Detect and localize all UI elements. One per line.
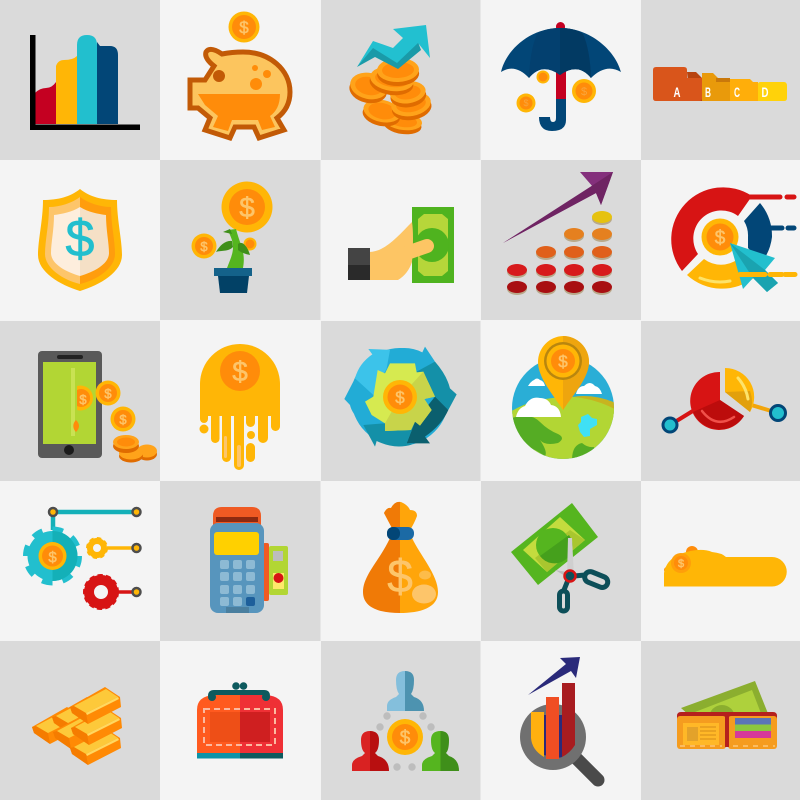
icon: umbrella: $ bbox=[581, 86, 587, 98]
icon: dripping coin: $ bbox=[232, 356, 248, 387]
icon: connected gears bbox=[28, 508, 140, 608]
icon: smartphone with coins: $ bbox=[79, 392, 87, 407]
icon: tabbed folders: D bbox=[762, 84, 768, 100]
icon: money plant bbox=[192, 182, 272, 293]
icon: smartphone with coins: $ bbox=[119, 412, 127, 427]
icon: card payment terminal bbox=[210, 507, 288, 613]
icon: growth arrow and coin columns bbox=[503, 172, 613, 295]
icon: circular arrows around coin: $ bbox=[395, 388, 405, 407]
icon: wallet with cash bbox=[677, 681, 777, 749]
icon: tabbed folders: A bbox=[674, 84, 680, 100]
icon: coin stack with arrow bbox=[347, 25, 433, 137]
icon: scissors cutting banknote bbox=[511, 503, 609, 611]
icon: piggy bank: $ bbox=[239, 18, 249, 37]
icon: dripping coin bbox=[200, 344, 280, 470]
icon: umbrella: $ bbox=[523, 98, 529, 108]
icon: globe with location pin: $ bbox=[558, 352, 568, 371]
icon: bar chart bbox=[30, 35, 140, 130]
icon: target with paper plane: $ bbox=[715, 228, 726, 249]
icon: coin purse bbox=[197, 682, 283, 758]
icon: money bag: $ bbox=[387, 550, 413, 602]
icon: pie chart with nodes bbox=[663, 368, 786, 432]
icon: people network around coin bbox=[352, 671, 459, 771]
icon: tabbed folders: B bbox=[705, 84, 711, 100]
icon: dollar shield: $ bbox=[66, 210, 95, 268]
icon: yellow banner with coins: $ bbox=[678, 558, 684, 570]
icon: money plant: $ bbox=[239, 192, 255, 223]
icon: gold bars bbox=[32, 687, 122, 765]
icon: smartphone with coins bbox=[38, 351, 157, 462]
icon: yellow banner with coins bbox=[664, 546, 787, 586]
icon: money plant: $ bbox=[200, 239, 208, 254]
icon: smartphone with coins: $ bbox=[104, 386, 112, 401]
icon: piggy bank bbox=[190, 12, 290, 138]
icon: target with paper plane bbox=[671, 187, 795, 292]
icon: circular arrows around coin bbox=[344, 347, 457, 447]
icon: tabbed folders: C bbox=[734, 84, 740, 100]
icon: money bag bbox=[363, 502, 438, 613]
icon: magnifier with bar chart bbox=[520, 657, 598, 780]
icon: umbrella bbox=[501, 22, 621, 131]
icon: people network around coin: $ bbox=[400, 728, 411, 749]
icon: hand holding banknote bbox=[348, 207, 454, 283]
icon: tabbed folders bbox=[653, 67, 787, 101]
icon: dollar shield bbox=[38, 189, 122, 291]
icon: connected gears: $ bbox=[48, 549, 57, 566]
icon: globe with location pin bbox=[512, 336, 614, 459]
